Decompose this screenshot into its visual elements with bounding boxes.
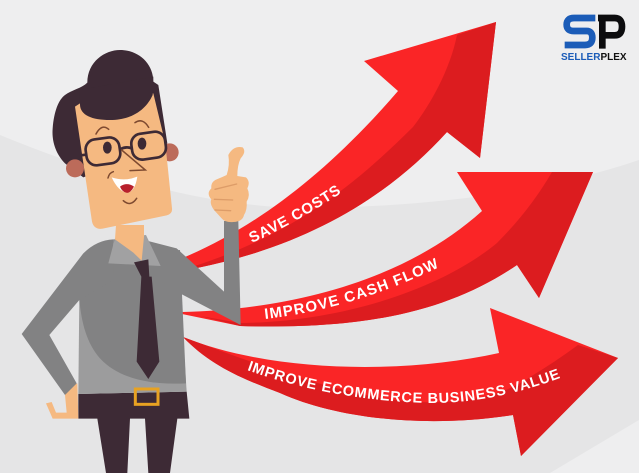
- lips: [120, 184, 134, 193]
- neck: [115, 225, 144, 261]
- logo mark: [565, 18, 622, 49]
- character: businessman: [22, 50, 249, 473]
- face: [75, 93, 172, 229]
- logo wordmark: SELLERPLEX: [561, 52, 627, 63]
- label: save costs: SAVE COSTS: [249, 186, 340, 242]
- left ear: [66, 159, 84, 177]
- eyebrows, nose and chin lines: [96, 121, 149, 204]
- shirt torso: [78, 290, 187, 394]
- collar: [108, 235, 161, 266]
- arrow: save costs: [186, 22, 496, 268]
- hair fringe: [79, 77, 153, 120]
- letter p: [598, 18, 622, 49]
- finger lines: [214, 184, 237, 211]
- shirt shaded area: [79, 250, 186, 384]
- mouth: [112, 177, 137, 193]
- eyes: [103, 142, 112, 154]
- trousers and belt: [78, 392, 189, 473]
- head and hand: [52, 50, 249, 229]
- belt buckle: [135, 389, 158, 404]
- left arm: [22, 239, 113, 395]
- hand on hip: [46, 383, 78, 419]
- letter s: [565, 18, 595, 45]
- tie: [134, 259, 159, 379]
- logo: sellerplex: [561, 18, 627, 63]
- arrow: improve ecommerce business value: [184, 308, 618, 456]
- right arm and sleeve: [147, 221, 241, 325]
- right ear: [161, 143, 179, 161]
- label: improve cash flow: IMPROVE CASH FLOW: [264, 258, 437, 319]
- arrow: improve cash flow: [182, 172, 593, 326]
- thumbs-up hand: [209, 147, 249, 222]
- glasses: [81, 130, 167, 167]
- label: improve ecommerce business value: IMPROVE ECOMMERCE BUSINESS VALUE: [248, 360, 560, 403]
- hair back: [52, 50, 167, 177]
- lower body: [22, 221, 241, 473]
